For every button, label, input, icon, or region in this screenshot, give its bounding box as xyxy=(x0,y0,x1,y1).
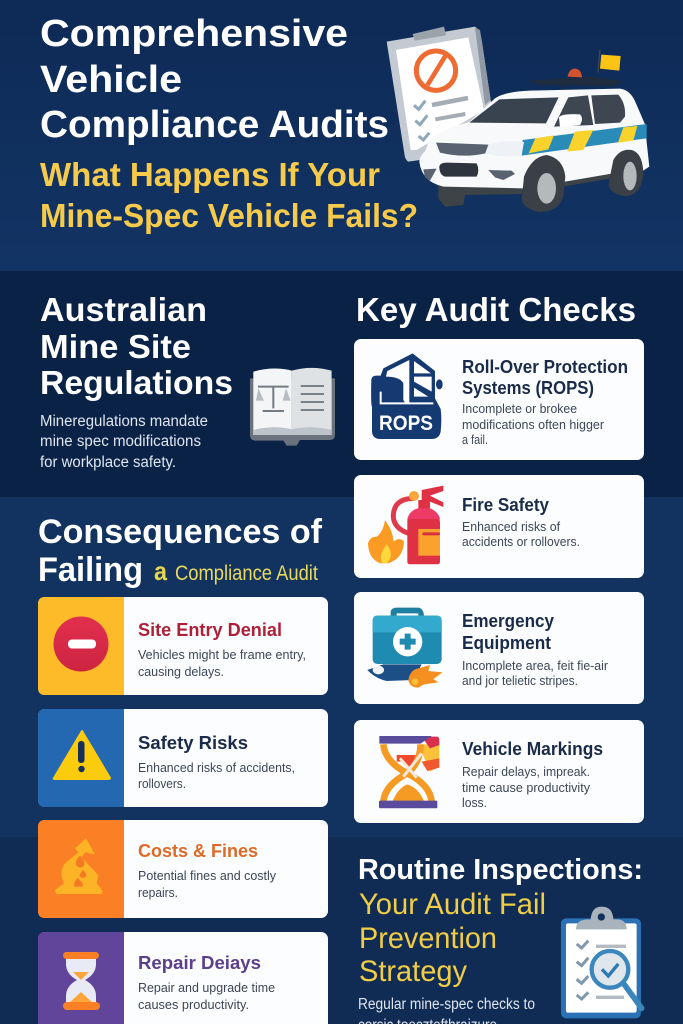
card: Vehicle Markings: Vehicle Markings xyxy=(462,739,603,759)
card: ROPS: ROPS xyxy=(379,412,433,435)
subtitle: What Happens If Your xyxy=(40,156,380,193)
card: Emergency Equipment: and jor telietic stripes. xyxy=(462,673,578,688)
icon: audit clipboard xyxy=(387,27,492,162)
card: Site Entry Denial xyxy=(38,597,328,695)
icon: first aid kit xyxy=(367,608,443,688)
card: ROPS: Systems (ROPS) xyxy=(462,378,594,398)
card: Emergency Equipment: Incomplete area, feit fie-air xyxy=(462,658,609,673)
text: regulations description: Mineregulations mandate xyxy=(40,413,208,430)
background: regulations band xyxy=(0,271,683,497)
icon: money bag xyxy=(55,838,103,894)
icon: sill xyxy=(563,173,613,187)
heading: Routine Inspections: Routine Inspections: xyxy=(358,854,643,886)
heading: Consequences of Failing a Compliance Audit: Consequences of xyxy=(38,513,323,551)
card: ROPS: modifications often higger xyxy=(462,417,605,432)
card: Safety Risks: rollovers. xyxy=(138,776,186,791)
icon: car body xyxy=(419,89,649,188)
card: Costs & Fines xyxy=(38,820,328,918)
card: Safety Risks: Enhanced risks of accidents, xyxy=(138,760,295,775)
card: Repair Deiays: Repair and upgrade time xyxy=(138,980,275,995)
background: bottom band xyxy=(0,837,683,1024)
card: Repair Deiays: Repair Deiays xyxy=(138,953,261,973)
heading: Australian Mine Site Regulations: Regulations xyxy=(40,364,233,401)
icon: clipboard and vehicle illustration xyxy=(387,27,649,212)
card: Fire Safety: Fire Safety xyxy=(462,495,549,515)
card: Emergency Equipment xyxy=(354,592,644,704)
icon: law book xyxy=(250,368,335,446)
title xyxy=(40,13,389,146)
icon: hourglass xyxy=(63,952,100,1010)
icon: fire extinguisher and flame xyxy=(368,486,443,564)
card: Repair Deiays: causes productivity. xyxy=(138,997,249,1012)
card: Safety Risks: Safety Risks xyxy=(138,733,248,753)
title: Compliance Audits xyxy=(40,104,389,146)
icon: rear wheel xyxy=(608,150,643,196)
icon: no entry xyxy=(54,616,108,672)
text: routine inspections description: Regular mine-spec checks to xyxy=(358,996,535,1013)
subheading: Your Audit Fail Prevention Strategy: Strategy xyxy=(359,955,467,988)
subheading: Your Audit Fail Prevention Strategy xyxy=(359,888,546,988)
heading: Consequences of Failing a Compliance Audit xyxy=(38,513,323,589)
card: Vehicle Markings: time cause productivity xyxy=(462,780,590,795)
heading: Australian Mine Site Regulations xyxy=(40,291,233,401)
card: ROPS xyxy=(354,339,644,460)
heading: Australian Mine Site Regulations: Australian xyxy=(40,291,207,328)
title: Comprehensive xyxy=(40,13,348,55)
card: Site Entry Denial: causing delays. xyxy=(138,664,224,679)
background: consequences band xyxy=(0,497,683,837)
card: Costs & Fines: Potential fines and costly xyxy=(138,868,276,883)
card: Site Entry Denial: Site Entry Denial xyxy=(138,620,282,640)
heading: Australian Mine Site Regulations: Mine Site xyxy=(40,328,191,365)
heading: Consequences of Failing a Compliance Audit: Compliance Audit xyxy=(175,562,318,585)
card: Costs & Fines: repairs. xyxy=(138,885,178,900)
text: regulations description xyxy=(40,413,208,471)
text: regulations description: mine spec modifications xyxy=(40,433,201,450)
icon: warning triangle xyxy=(54,731,110,779)
card: Emergency Equipment: Emergency xyxy=(462,611,554,631)
text: regulations description: for workplace safety. xyxy=(40,454,176,471)
icon: clipboard with magnifier xyxy=(561,907,642,1018)
icon: roof beacon and flag xyxy=(528,49,623,91)
card: Costs & Fines: Costs & Fines xyxy=(138,841,258,861)
card: Vehicle Markings: loss. xyxy=(462,795,487,810)
subheading: Your Audit Fail Prevention Strategy: Prevention xyxy=(359,922,497,955)
card: Vehicle Markings: Repair delays, impreak. xyxy=(462,764,590,779)
card: Emergency Equipment: Equipment xyxy=(462,633,551,653)
icon: body stripes xyxy=(522,124,647,156)
card: ROPS: Roll-Over Protection xyxy=(462,357,628,377)
card: Fire Safety: Enhanced risks of xyxy=(462,519,560,534)
icon: ROPS roll cage xyxy=(371,353,443,439)
heading: Consequences of Failing a Compliance Audit: Failing xyxy=(38,551,143,589)
card: Vehicle Markings xyxy=(354,720,644,823)
icon: front wheel xyxy=(522,155,565,212)
text: routine inspections description xyxy=(358,996,535,1024)
icon: under-body and far tyre xyxy=(438,185,523,207)
subtitle xyxy=(40,156,418,234)
heading: Key Audit Checks: Key Audit Checks xyxy=(356,291,636,328)
icon: marking hourglass xyxy=(379,736,439,808)
card: ROPS: a fail. xyxy=(462,432,488,447)
background: header band xyxy=(0,0,683,271)
card: Fire Safety xyxy=(354,475,644,578)
card: Repair Deiays xyxy=(38,932,328,1024)
card: Site Entry Denial: Vehicles might be frame entry, xyxy=(138,647,306,662)
subtitle: Mine-Spec Vehicle Fails? xyxy=(40,197,418,234)
card: Safety Risks xyxy=(38,709,328,807)
heading: Consequences of Failing a Compliance Audit: a xyxy=(154,556,167,586)
title: Vehicle xyxy=(40,59,182,101)
card: Fire Safety: accidents or rollovers. xyxy=(462,534,580,549)
subheading: Your Audit Fail Prevention Strategy: Your Audit Fail xyxy=(359,888,546,921)
card: ROPS: Incomplete or brokee xyxy=(462,401,577,416)
